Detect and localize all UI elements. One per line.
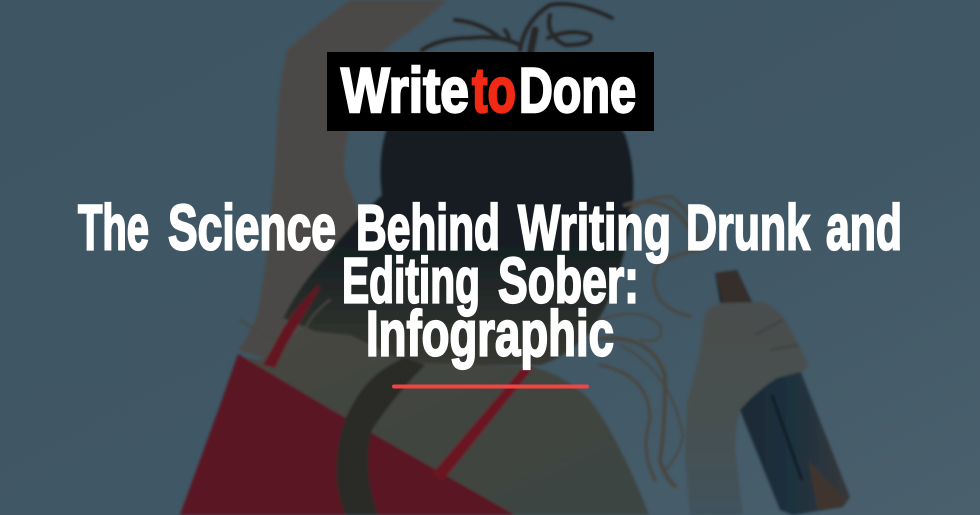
dress: [180, 354, 515, 515]
title: [78, 192, 902, 370]
title: and: [826, 192, 902, 264]
title: Writing: [518, 192, 671, 264]
left strap: [263, 285, 320, 368]
title: Drunk: [686, 192, 810, 264]
title: Editing: [342, 244, 480, 316]
hair wisps: [240, 197, 702, 486]
logo: Done: [519, 56, 636, 126]
logo: [327, 52, 654, 131]
back and shoulder: [238, 330, 649, 515]
bottle: [715, 270, 850, 515]
title: Behind: [356, 192, 500, 264]
title: Sober:: [498, 244, 639, 316]
right strap: [432, 366, 534, 482]
title: Science: [168, 192, 336, 264]
hair curls above logo: [422, 4, 612, 55]
hair mass: [283, 65, 633, 365]
logo: to: [472, 56, 516, 126]
title: Infographic: [366, 298, 614, 370]
raised arm: [238, 0, 447, 370]
title: The: [78, 192, 149, 264]
logo: Write: [341, 56, 469, 126]
hand and forearm: [685, 302, 808, 515]
finger creases: [755, 320, 798, 350]
long hair lock: [336, 358, 425, 515]
divider accent line: [392, 384, 589, 388]
